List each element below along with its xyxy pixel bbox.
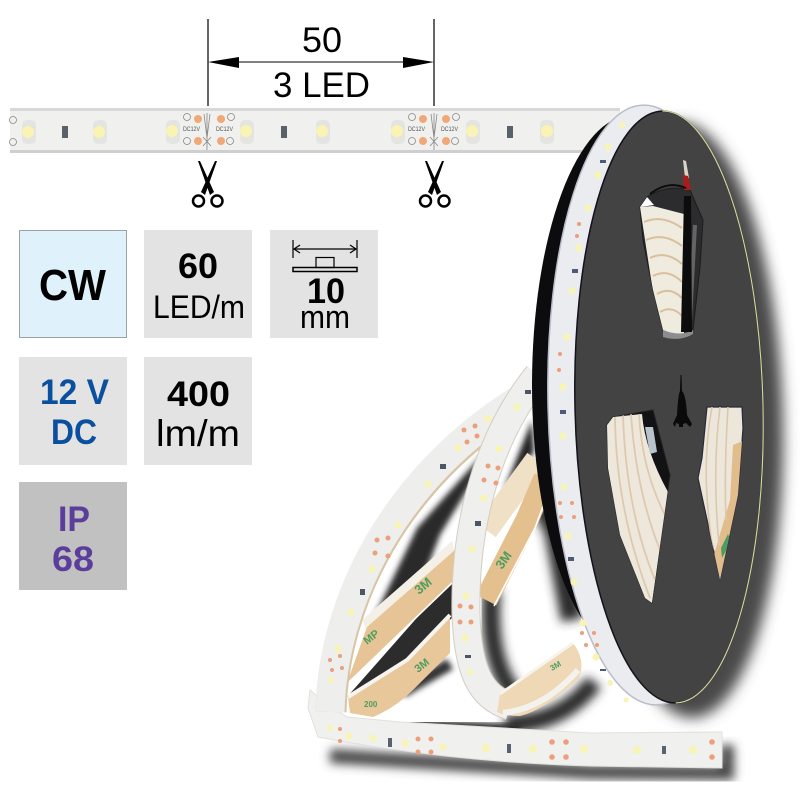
loose strip: middle loop with tail: 3M [548, 659, 563, 673]
tile: width 10 mm: 10 [307, 272, 345, 311]
top straight LED strip: DC12V [183, 127, 200, 133]
loose strip: middle loop with tail [458, 375, 581, 716]
reel: lower right window [698, 407, 745, 582]
tile: 400 lm/m [144, 357, 252, 465]
reel: front flange [568, 109, 770, 705]
icon: strip width profile [293, 240, 357, 272]
icon: scissors right [420, 161, 450, 206]
backing band A: 3M [411, 574, 435, 597]
reel: back flange [532, 115, 732, 655]
reel: rim highlight [662, 109, 770, 703]
reel: connecting wire [650, 160, 692, 332]
icon: reel logo rocket [673, 375, 692, 427]
tile: 400 lm/m: 400 [167, 375, 230, 414]
tile: colour CW: CW [39, 261, 106, 310]
tile: protection IP 68: IP [58, 500, 90, 539]
tile: voltage 12 V DC: DC [51, 413, 97, 452]
tile: width 10 mm [270, 230, 378, 338]
shadows under loose strip [330, 420, 727, 773]
backing band B: 3M [412, 656, 432, 675]
backing band B: 3M [492, 548, 515, 572]
top straight LED strip: DC12V [441, 127, 458, 133]
tile: 60 LED/m: 60 [178, 247, 218, 286]
tile: width 10 mm: mm [300, 299, 350, 335]
tile: colour CW [20, 230, 126, 338]
loose strip: large left loop [328, 401, 518, 712]
backing band A: MP [361, 628, 382, 647]
tile: voltage 12 V DC [19, 357, 127, 465]
top straight LED strip: DC12V [408, 127, 425, 133]
tile: voltage 12 V DC: 12 V [40, 373, 110, 412]
tile: protection IP 68: 68 [52, 540, 94, 579]
loose strip: bottom straight section [308, 690, 722, 768]
reel: wound strip edge [541, 103, 759, 707]
tan adhesive backing bands [347, 460, 552, 717]
reel: lower left window [600, 410, 670, 603]
dimension annotation: 50 / 3 LED: 50 [302, 21, 342, 60]
backing band A [347, 460, 537, 684]
tile: protection IP 68 [19, 482, 127, 590]
top straight LED strip [10, 108, 620, 153]
reel drop shadow [582, 120, 790, 720]
dark gap between backing bands [347, 578, 452, 697]
top straight LED strip: DC12V [216, 127, 233, 133]
dimension annotation: 50 / 3 LED [208, 19, 434, 106]
tile: 400 lm/m: lm/m [156, 413, 240, 454]
LED reel [532, 103, 770, 707]
tile: 60 LED/m [144, 230, 252, 338]
tile: 60 LED/m: LED/m [153, 289, 245, 325]
backing band B: 200 [364, 700, 378, 709]
icon: scissors left [193, 161, 222, 206]
reel: upper window with wound strip [640, 188, 703, 339]
dimension annotation: 50 / 3 LED: 3 LED [273, 66, 370, 105]
backing band B [348, 478, 552, 717]
